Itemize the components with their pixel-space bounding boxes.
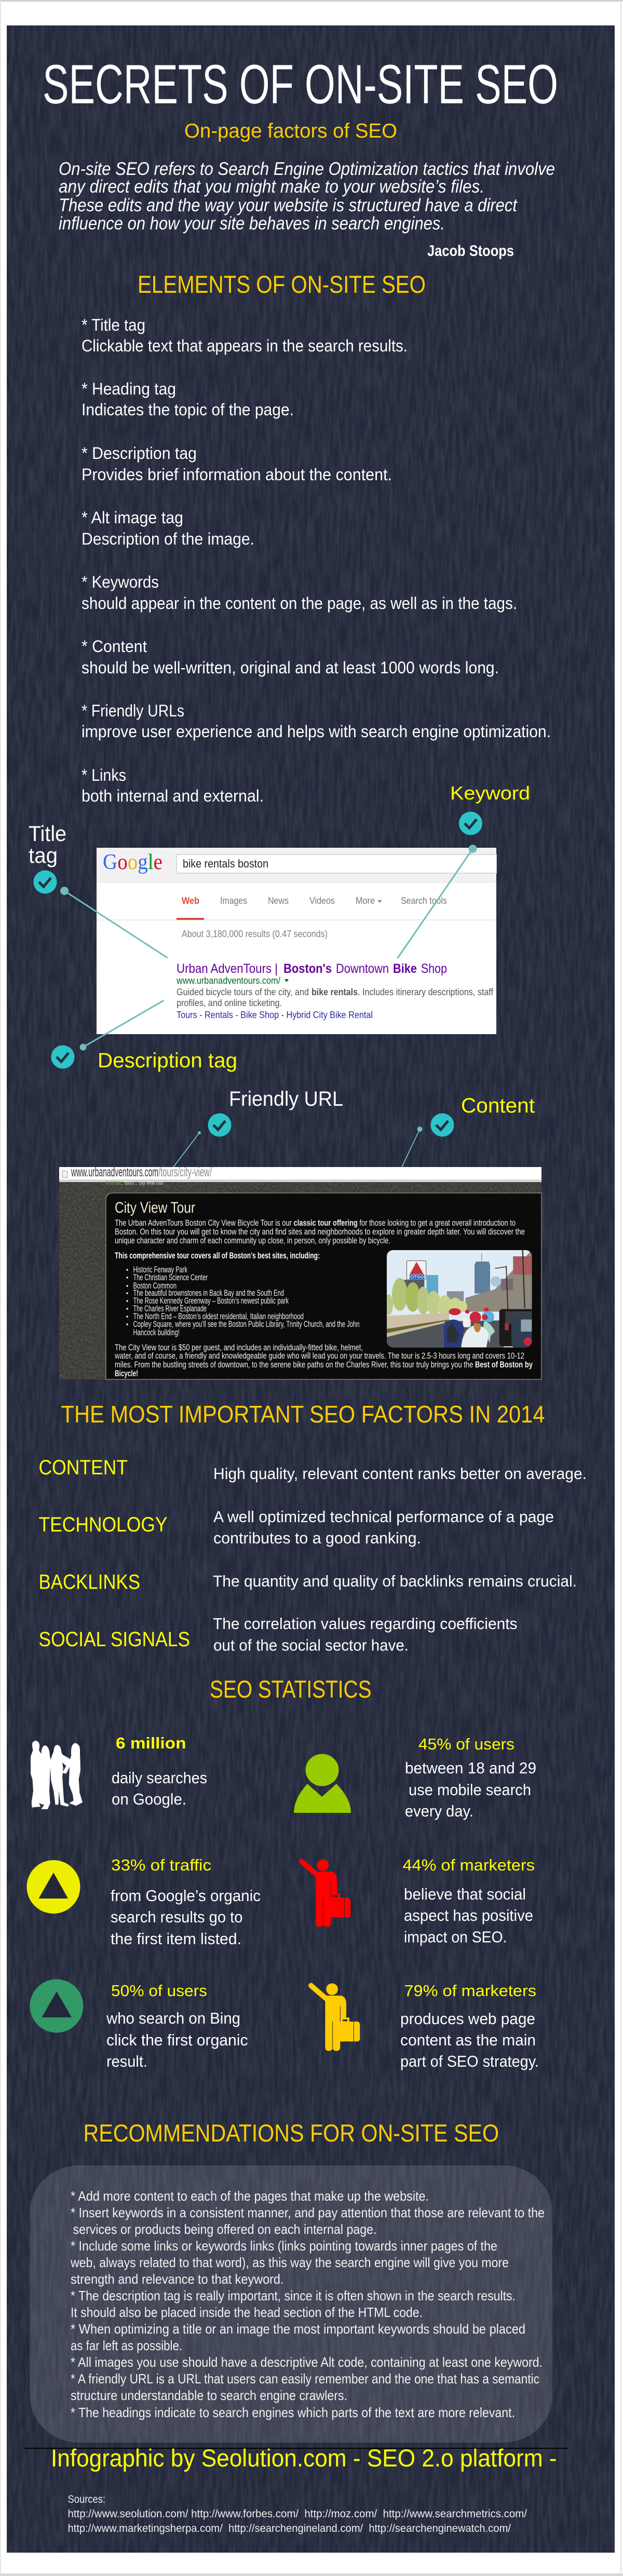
recommendations text: * A friendly URL is a URL that users can easily remember and the one that has a semantic: [71, 2371, 539, 2387]
elements list: * Title tag: [82, 316, 145, 334]
stat: 44% of marketers: [302, 1856, 535, 1946]
callout: title tag: tag: [29, 843, 58, 867]
search result: [176, 961, 494, 1020]
page copy: The Christian Science Center: [133, 1272, 208, 1282]
stat: 79% of marketers: part of SEO strategy.: [400, 2052, 539, 2070]
stat: 6 million: [31, 1734, 207, 1809]
recommendations text: It should also be placed inside the head section of the HTML code.: [71, 2304, 423, 2320]
sources: Sources:: [67, 2493, 105, 2505]
callout: content: Content: [461, 1094, 535, 1117]
url bar text: www.urbanadventours.com: [71, 1165, 158, 1179]
search result: Boston's: [283, 961, 332, 976]
search result: . Includes itinerary descriptions, staff: [358, 987, 494, 997]
stat: 33% of traffic: 33% of traffic: [111, 1856, 211, 1874]
sources: http://www.seolution.com/ http://www.forbes.com/ http://moz.com/ http://www.searchmetrics.com/: [67, 2508, 527, 2520]
search query: bike rentals boston: [183, 857, 268, 870]
callout: description tag: [51, 1000, 237, 1072]
callout: keyword: Keyword: [450, 782, 530, 804]
page copy: The City View tour is $50 per guest, and includes an individually-fitted bike, helmet,: [115, 1343, 363, 1352]
recommendations text: as far left as possible.: [71, 2338, 182, 2353]
stat: 33% of traffic: [27, 1856, 261, 1948]
factor: technology: A well optimized technical performance of a page: [213, 1508, 554, 1526]
google search screenshot: [97, 848, 496, 1034]
page copy: The Urban AdvenTours Boston City View Bicycle Tour is our classic tour offering for those looking to get a great overall introduction to: [115, 1218, 516, 1228]
heading: most important seo factors: THE MOST IMPORTANT SEO FACTORS IN 2014: [61, 1401, 545, 1428]
tabs: Images: [220, 896, 247, 906]
elements list: * Description tag: [82, 444, 197, 463]
stat: 50% of users: [30, 1979, 248, 2070]
elements list: * Content: [82, 637, 147, 656]
factor: backlinks: BACKLINKS: [38, 1571, 140, 1594]
search result: bike rentals: [312, 987, 358, 997]
callout: content: [402, 1094, 535, 1167]
elements list: * Links: [82, 766, 126, 784]
elements list: improve user experience and helps with search engine optimization.: [82, 722, 551, 741]
stat: 50% of users: click the first organic: [106, 2031, 248, 2049]
breadcrumb: home: [105, 1179, 121, 1186]
recommendations text: web, always related to that word), as this way the search engine will give you more: [70, 2255, 509, 2270]
search result: Shop: [421, 961, 447, 976]
recommendations text: * Add more content to each of the pages that make up the website.: [71, 2188, 429, 2204]
stat: 33% of traffic: search results go to: [111, 1908, 243, 1926]
photo: cyclists in boston: [387, 1250, 532, 1348]
page copy: This comprehensive tour covers all of Boston’s best sites, including:: [115, 1251, 320, 1260]
page copy: The Rose Kennedy Greenway – Boston’s newest public park: [133, 1296, 289, 1306]
subtitle: On-page factors of SEO: [184, 120, 397, 142]
sources: http://www.marketingsherpa.com/ http://searchengineland.com/ http://searchenginewatch.com/: [67, 2523, 511, 2534]
icon: orange traveller: [311, 1983, 360, 2051]
factor: social signals: [38, 1615, 517, 1654]
google logo: Google: [103, 850, 162, 874]
factor: backlinks: [38, 1571, 577, 1594]
search result: Guided bicycle tours of the city, and: [177, 987, 309, 997]
elements list: should appear in the content on the page, as well as in the tags.: [82, 594, 517, 613]
callout: keyword: [398, 782, 530, 958]
tabs: Search tools: [401, 896, 447, 906]
recommendations text: structure understandable to search engine crawlers.: [71, 2388, 347, 2403]
factor: content: High quality, relevant content ranks better on average.: [213, 1465, 587, 1483]
callout: friendly url: [173, 1088, 343, 1167]
stat: 45% of users: 45% of users: [418, 1735, 514, 1753]
page copy: Boston Common: [133, 1281, 177, 1291]
icon: page: [62, 1171, 67, 1177]
stat: 44% of marketers: 44% of marketers: [403, 1856, 535, 1874]
stat: 33% of traffic: the first item listed.: [111, 1930, 241, 1948]
citgo sign: CITGO: [410, 1275, 424, 1279]
page copy: [114, 1218, 533, 1378]
tabs: News: [268, 896, 289, 906]
icon: yellow circle with triangle: [27, 1860, 80, 1914]
icon: red traveller: [302, 1859, 350, 1927]
factor: technology: [38, 1508, 554, 1547]
footer credit: Infographic by Seolution.com - SEO 2.o platform -: [51, 2444, 557, 2472]
recommendations text: * Include some links or keywords links (links pointing towards inner pages of the: [71, 2238, 497, 2254]
panel: recommendations: [30, 2165, 552, 2443]
recommendations text: * All images you use should have a descriptive Alt code, containing at least one keyword.: [71, 2354, 543, 2370]
intro text: These edits and the way your website is structured have a direct: [59, 195, 518, 215]
elements list: * Keywords: [82, 573, 159, 591]
heading: seo statistics: SEO STATISTICS: [210, 1675, 372, 1703]
search result: Downtown: [336, 961, 389, 976]
factor: backlinks: The quantity and quality of backlinks remains crucial.: [213, 1572, 577, 1590]
recommendations text: [70, 2188, 545, 2420]
elements list: [82, 316, 551, 805]
page copy: Hancock building!: [133, 1327, 180, 1337]
stat: 44% of marketers: impact on SEO.: [404, 1928, 507, 1946]
page copy: Bicycle!: [115, 1368, 138, 1378]
heading: elements of on-site seo: ELEMENTS OF ON-SITE SEO: [138, 270, 426, 298]
elements list: Description of the image.: [82, 530, 254, 548]
icon: group of people: [31, 1741, 83, 1809]
tabs: More: [356, 896, 375, 906]
intro text: On-site SEO refers to Search Engine Optimization tactics that involve: [59, 159, 555, 179]
factor: technology: contributes to a good ranking.: [213, 1529, 421, 1547]
recommendations text: * When optimizing a title or an image the most important keywords should be placed: [71, 2321, 525, 2337]
factor: content: [38, 1456, 587, 1483]
search result: Bike: [393, 961, 417, 976]
factor: social signals: SOCIAL SIGNALS: [38, 1628, 190, 1651]
stat: 45% of users: use mobile search: [409, 1781, 531, 1799]
elements list: Clickable text that appears in the search results.: [82, 336, 408, 355]
heading: recommendations: RECOMMENDATIONS FOR ON-SITE SEO: [83, 2119, 499, 2147]
recommendations text: * Insert keywords in a consistent manner, and pay attention that those are relevant to the: [71, 2205, 545, 2220]
elements list: Indicates the topic of the page.: [82, 400, 294, 419]
callout: title tag: Title: [29, 821, 66, 846]
page copy: Historic Fenway Park: [133, 1265, 187, 1275]
stat: 45% of users: between 18 and 29: [405, 1759, 536, 1777]
stat: 45% of users: every day.: [405, 1802, 473, 1820]
search result: Urban AdvenTours |: [177, 961, 278, 976]
page copy: The Charles River Esplanade: [133, 1304, 207, 1313]
page copy: unique character and charm of each community up close, in person, only possible by bicycle.: [115, 1236, 390, 1245]
icon: green circle with triangle: [30, 1979, 83, 2033]
page heading: City View Tour: [115, 1199, 195, 1216]
recommendations text: services or products being offered on each internal page.: [73, 2221, 377, 2237]
elements list: both internal and external.: [82, 787, 264, 805]
citgo sign: [407, 1260, 426, 1280]
url bar text: /tours/city-view/: [158, 1165, 212, 1179]
author: Jacob Stoops: [427, 242, 514, 260]
elements list: Provides brief information about the content.: [82, 465, 392, 484]
intro text: influence on how your site behaves in search engines.: [59, 213, 445, 234]
intro text: [59, 159, 555, 234]
search result: Tours - Rentals - Bike Shop - Hybrid City Bike Rental: [177, 1010, 373, 1020]
stat: 44% of marketers: believe that social: [404, 1885, 526, 1903]
results count: About 3,180,000 results (0.47 seconds): [182, 929, 328, 939]
search result: profiles, and online ticketing.: [177, 998, 282, 1008]
elements list: should be well-written, original and at least 1000 words long.: [82, 658, 499, 677]
page copy: miles. From the bustling streets of downtown, to the serene bike paths on the Charles River, this tour truly brings you the Best of Boston by: [115, 1360, 533, 1370]
recommendations text: * The description tag is really important, since it is often shown in the search results.: [71, 2288, 516, 2303]
stat: 79% of marketers: 79% of marketers: [404, 1982, 536, 2000]
factor: social signals: The correlation values regarding coefficients: [213, 1615, 517, 1633]
breadcrumb: :: tours :: city view tour: [121, 1179, 164, 1186]
stat: 79% of marketers: [311, 1982, 539, 2070]
elements list: * Alt image tag: [82, 508, 183, 527]
stat: 50% of users: who search on Bing: [106, 2009, 240, 2027]
recommendations text: strength and relevance to that keyword.: [71, 2271, 283, 2287]
recommendations text: * The headings indicate to search engines which parts of the text are more relevant.: [71, 2405, 515, 2420]
elements list: * Friendly URLs: [82, 701, 184, 720]
stat: 6 million: 6 million: [116, 1734, 186, 1752]
callout: title tag: [29, 821, 167, 958]
tabs: Videos: [309, 896, 335, 906]
stat: 44% of marketers: aspect has positive: [404, 1906, 533, 1924]
sources: [67, 2493, 527, 2534]
page copy: The North End – Boston’s oldest residential, Italian neighborhood: [133, 1311, 304, 1321]
stat: 50% of users: result.: [106, 2052, 147, 2070]
icon: green person: [294, 1754, 351, 1813]
factor: social signals: out of the social sector have.: [213, 1636, 409, 1654]
stat: 79% of marketers: produces web page: [400, 2010, 535, 2028]
factor: content: CONTENT: [38, 1456, 128, 1479]
stat: 33% of traffic: from Google’s organic: [111, 1887, 261, 1905]
factor: technology: TECHNOLOGY: [38, 1513, 167, 1536]
stat: 6 million: daily searches: [112, 1769, 207, 1787]
stat: 79% of marketers: content as the main: [400, 2031, 536, 2049]
website screenshot: [59, 1165, 541, 1379]
content panel: [106, 1193, 541, 1379]
stat: 45% of users: [294, 1735, 536, 1820]
stat: 6 million: on Google.: [112, 1790, 186, 1808]
search result: www.urbanadventours.com/: [176, 975, 280, 986]
tabs: [97, 896, 496, 920]
page copy: Copley Square, where you’ll see the Boston Public Library, Trinity Church, and the John: [133, 1319, 359, 1329]
page copy: The beautiful brownstones in Back Bay and the South End: [133, 1288, 284, 1298]
callout: friendly url: Friendly URL: [229, 1088, 343, 1110]
tabs: Web: [182, 896, 199, 906]
intro text: any direct edits that you might make to your website’s files.: [59, 177, 484, 197]
breadcrumb: [105, 1179, 164, 1186]
callout: description tag: Description tag: [98, 1049, 237, 1072]
elements list: * Heading tag: [82, 379, 176, 398]
stat: 50% of users: 50% of users: [111, 1982, 207, 2000]
